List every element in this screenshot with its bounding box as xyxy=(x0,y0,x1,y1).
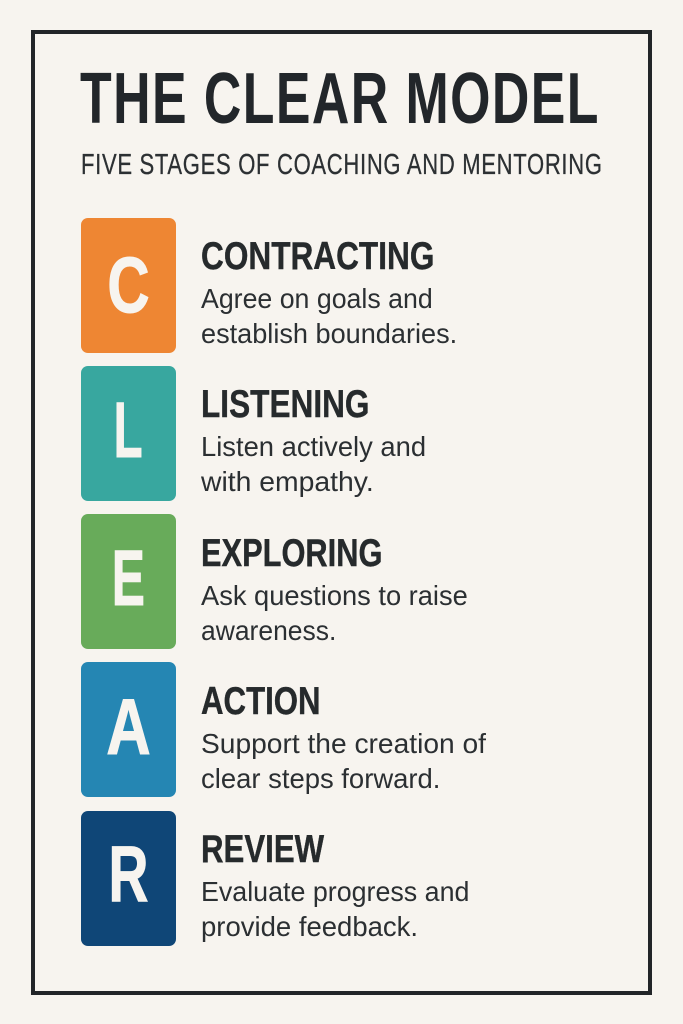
tile: A: A xyxy=(106,682,151,771)
tile: R: R xyxy=(109,829,148,918)
stage: review: Evaluate progress and xyxy=(201,876,469,907)
stage: exploring xyxy=(201,532,468,646)
title: THE CLEAR MODEL xyxy=(80,59,599,139)
stage: exploring: awareness. xyxy=(201,615,336,646)
stage: action: clear steps forward. xyxy=(201,763,440,794)
subtitle: FIVE STAGES OF COACHING AND MENTORING xyxy=(81,149,603,181)
tile: C: C xyxy=(107,240,150,329)
tile: L: L xyxy=(114,385,143,474)
tile: L xyxy=(81,366,176,501)
tile: R xyxy=(81,811,176,946)
tile: E xyxy=(81,514,176,649)
stage: listening: with empathy. xyxy=(201,466,374,497)
stage: listening xyxy=(201,383,426,497)
stage: exploring: EXPLORING xyxy=(201,532,382,575)
stage: listening: LISTENING xyxy=(201,383,369,426)
tile: E: E xyxy=(112,533,145,622)
stage: exploring: Ask questions to raise xyxy=(201,580,468,611)
stage: contracting: establish boundaries. xyxy=(201,318,457,349)
tile: C xyxy=(81,218,176,353)
tile: A xyxy=(81,662,176,797)
stage: contracting xyxy=(201,235,457,349)
stage: listening: Listen actively and xyxy=(201,431,426,462)
stage: contracting: CONTRACTING xyxy=(201,235,434,278)
stage: review xyxy=(201,828,469,942)
stage: review: REVIEW xyxy=(201,828,324,871)
stage: review: provide feedback. xyxy=(201,911,418,942)
stage: contracting: Agree on goals and xyxy=(201,283,433,314)
stage: action: Support the creation of xyxy=(201,728,486,759)
stage: action: ACTION xyxy=(201,680,321,723)
stage: action xyxy=(201,680,486,794)
